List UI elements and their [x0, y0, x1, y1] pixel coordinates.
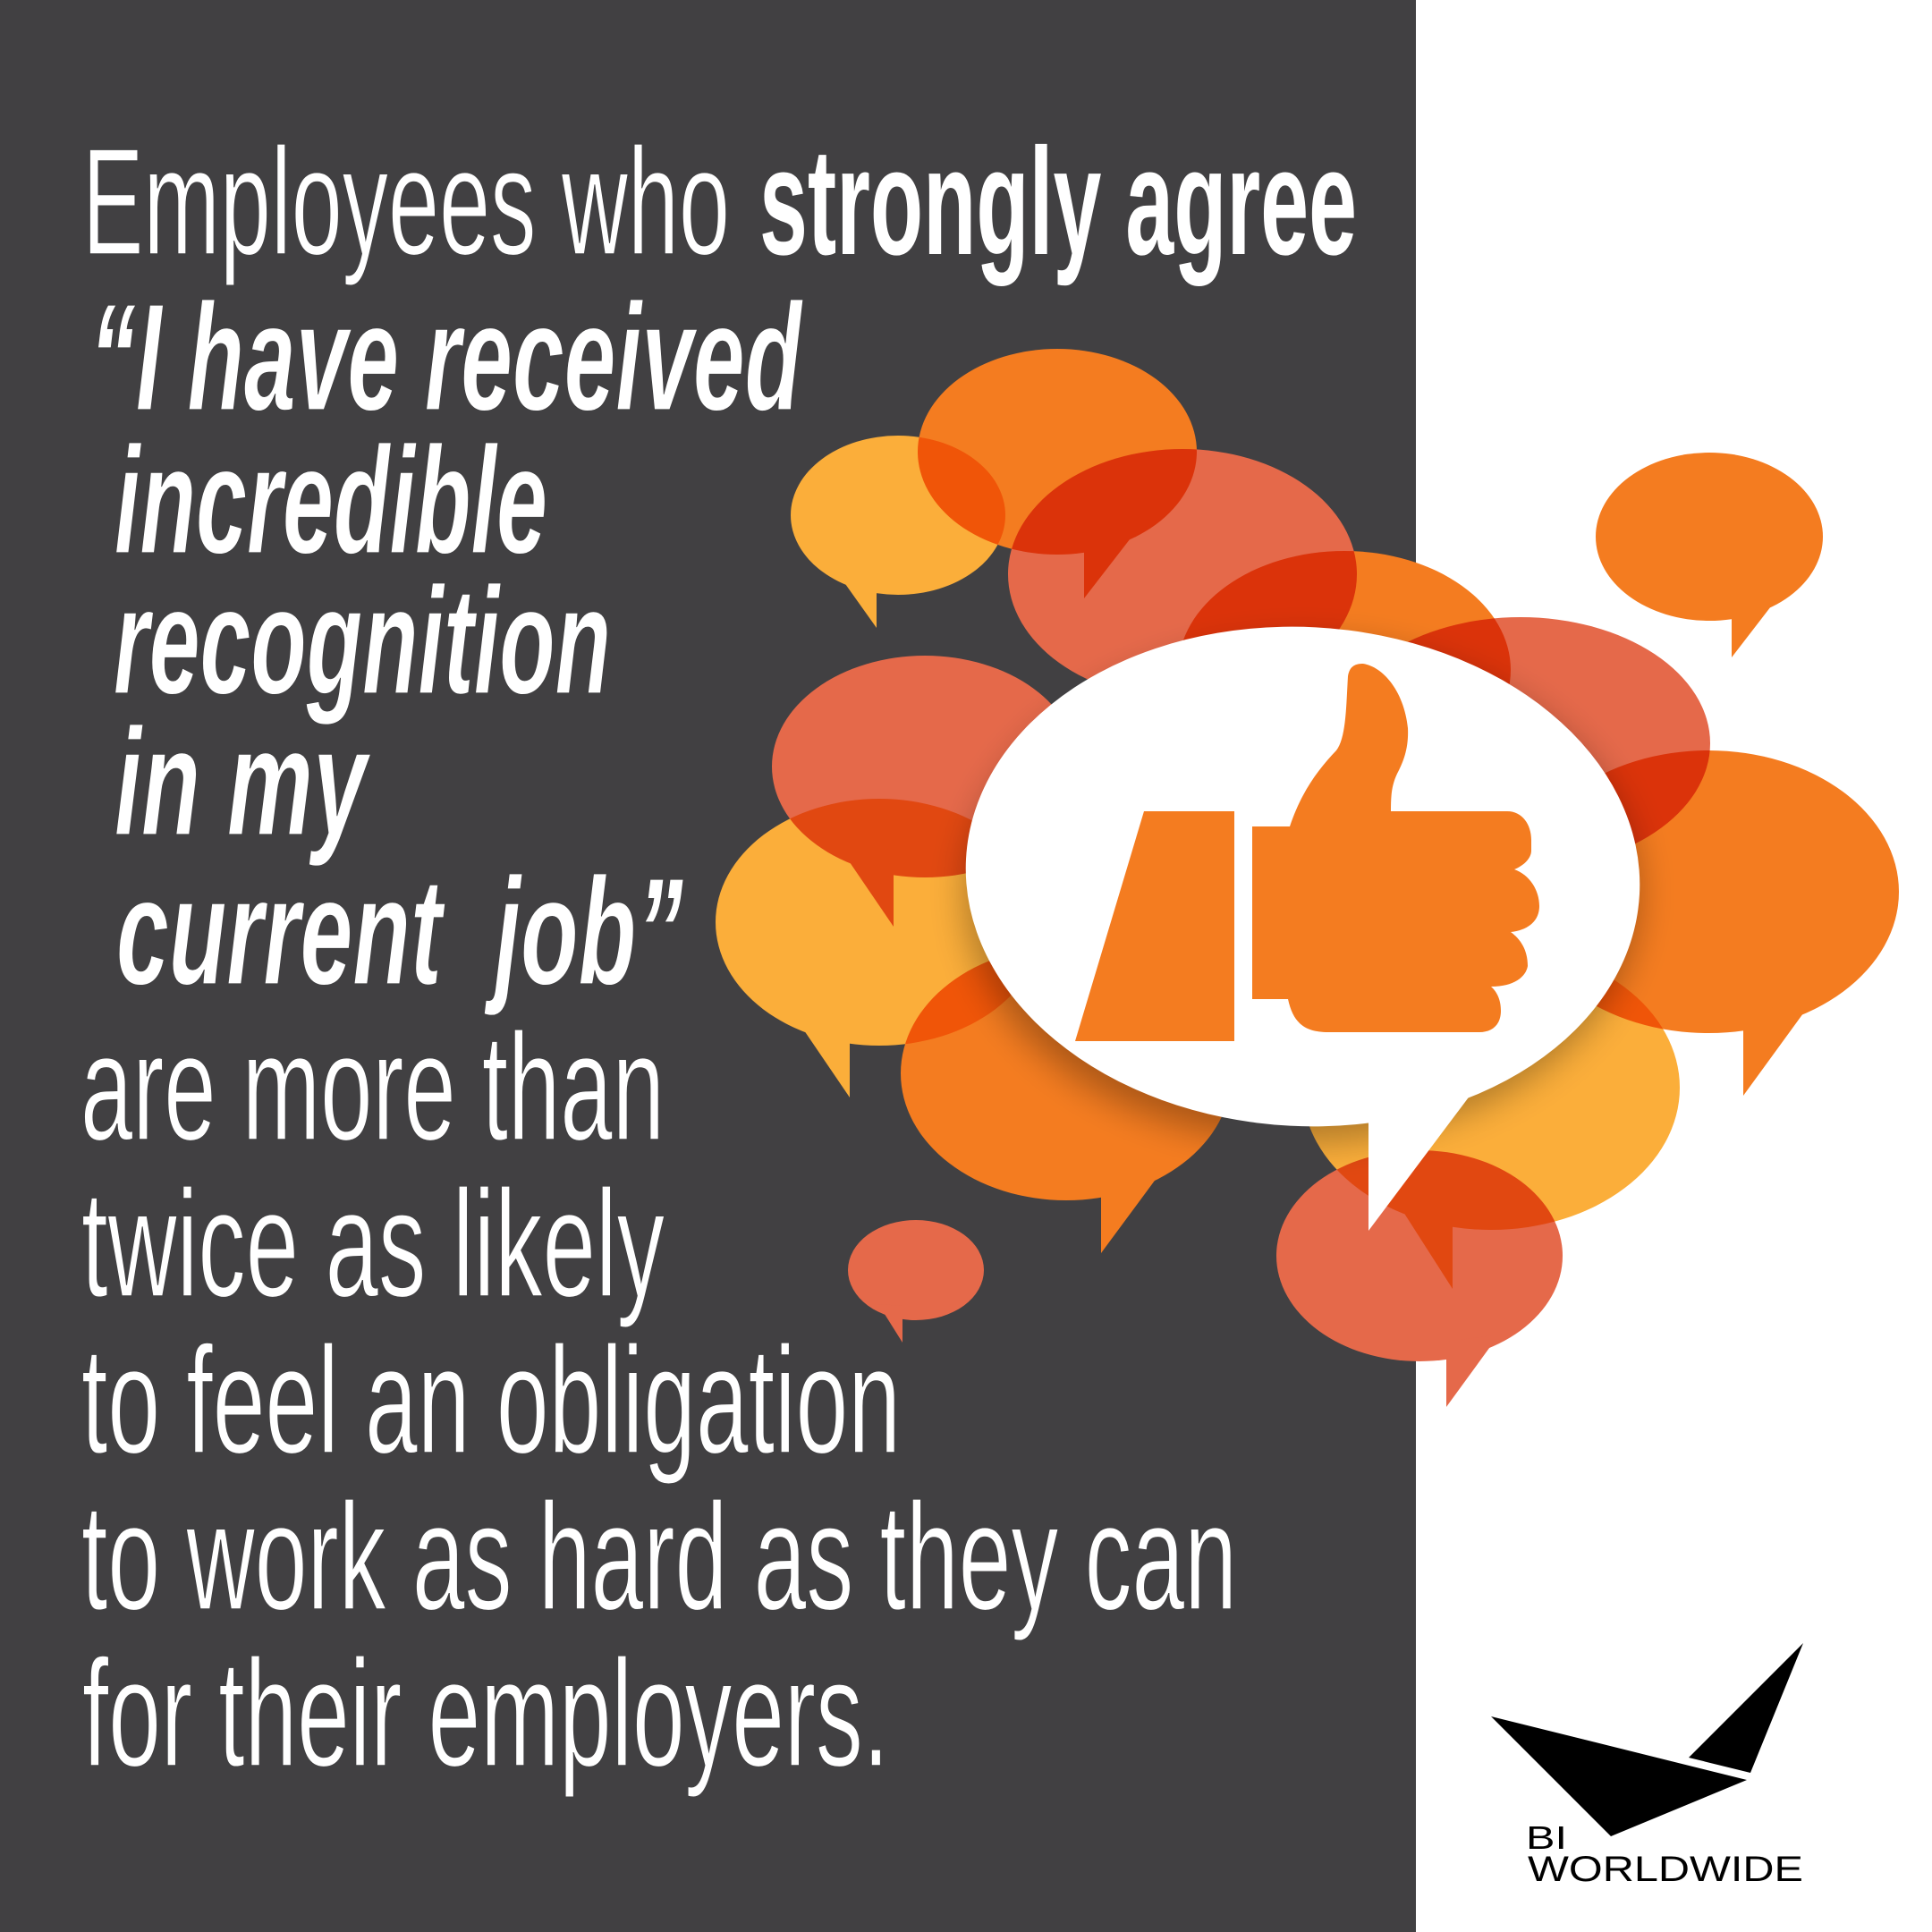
bubble: orange lower left [901, 946, 1232, 1253]
bubble: orange large right [1518, 750, 1899, 1096]
line: to work as hard as they can: to work as hard as they can [81, 1472, 1237, 1642]
bubble: salmon left [772, 656, 1078, 927]
line: Employees who: Employees who [82, 117, 730, 287]
main white speech bubble [953, 610, 1653, 1231]
logo text: WORLDWIDE: WORLDWIDE [1528, 1850, 1803, 1889]
bubble: salmon upper [1008, 449, 1357, 699]
icon: thumbs up [1075, 664, 1539, 1041]
bubble: small salmon [848, 1220, 984, 1343]
bubble: yellow left [716, 799, 1043, 1097]
quote: recognition: recognition [114, 556, 611, 726]
quote: in my: in my [114, 698, 371, 868]
BI Worldwide logo [1491, 1643, 1803, 1889]
logo mark: large wing [1491, 1716, 1747, 1836]
bubble: orange top [918, 349, 1197, 598]
line: twice as likely: twice as likely [81, 1159, 665, 1329]
line: to feel an obligation: to feel an obligation [81, 1316, 901, 1486]
line: strongly agree: strongly agree [759, 117, 1357, 287]
line: are more than: are more than [80, 1003, 665, 1173]
quote: incredible: incredible [114, 416, 547, 586]
bubble: orange top right [1596, 453, 1823, 657]
bubble: yellow top left [791, 436, 1005, 628]
quote: current job: current job” [116, 847, 683, 1017]
bubble: salmon bottom [1276, 1150, 1563, 1407]
headline text block [80, 117, 1357, 1799]
thumb hand [1252, 664, 1539, 1032]
soft shadow under main bubble [965, 643, 1640, 1142]
logo text: BI: BI [1526, 1819, 1567, 1856]
speech bubble cluster [716, 349, 1899, 1407]
thumb cuff [1075, 811, 1234, 1041]
logo mark: small wing [1689, 1643, 1803, 1773]
bubble: salmon right [1331, 617, 1710, 869]
line: for their employers.: for their employers. [82, 1629, 889, 1799]
bubble: orange behind centre [1178, 551, 1511, 789]
dark left panel [0, 0, 1416, 1932]
quote: I have received: “I have received [89, 273, 803, 443]
bubble: yellow lower right [1302, 945, 1680, 1289]
